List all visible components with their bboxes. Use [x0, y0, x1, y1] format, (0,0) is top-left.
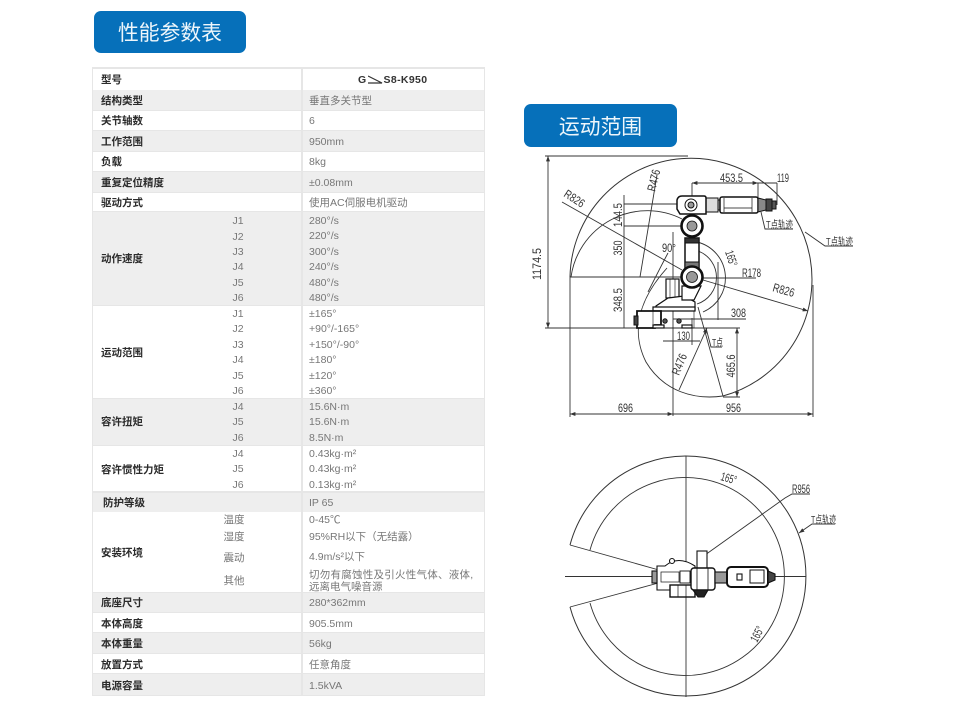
row group: motion range: J1: [232, 308, 244, 320]
row group: allowable inertia: [93, 446, 484, 491]
row group: allowable inertia: 0.43kg·m²: [309, 463, 356, 475]
row group: allowable torque: J6: [232, 432, 244, 444]
row: payload: 负载: [101, 156, 122, 168]
row group: allowable inertia: J5: [232, 463, 244, 475]
row group: motion range: J6: [232, 385, 244, 397]
side view labels: R826: [561, 187, 588, 211]
row: payload: 8kg: [309, 156, 326, 168]
radial limit lines: [570, 545, 666, 572]
row group: allowable torque: 8.5N·m: [309, 432, 343, 444]
row: working range: [101, 136, 344, 148]
side view labels: 465.6: [724, 354, 738, 378]
row group: installation environment: [93, 512, 484, 593]
row: drive method: 驱动方式: [101, 197, 143, 209]
row group: allowable torque: 15.6N·m: [309, 401, 349, 413]
row: protection class: [103, 497, 333, 509]
J2 range arcs: [697, 242, 725, 312]
heading: motion range: [524, 104, 677, 147]
top view labels: [719, 469, 836, 644]
row: joint axes: 关节轴数: [101, 115, 143, 127]
row: base size: 底座尺寸: [101, 597, 143, 609]
row group: motion range: 运动范围: [101, 347, 143, 359]
row group: allowable torque: 容许扭矩: [101, 416, 143, 428]
row group: installation environment: 温度: [224, 514, 244, 526]
row: power capacity: 电源容量: [101, 680, 143, 692]
row: repeatability: [101, 177, 353, 189]
row group: motion speed: 动作速度: [101, 253, 143, 265]
table background: [92, 67, 485, 696]
row: body height: [93, 613, 484, 632]
row: joint axes: [93, 111, 484, 130]
side view labels: 348.5: [611, 288, 625, 312]
row group: installation environment: 其他: [224, 575, 244, 587]
row group: motion speed: 480°/s: [309, 277, 339, 289]
row: structure type: 垂直多关节型: [309, 95, 372, 107]
row group: motion range: ±180°: [309, 354, 336, 366]
row group: installation environment: 0-45℃: [309, 514, 341, 526]
chart: top view working envelope: [565, 456, 835, 697]
row group: motion range: J3: [232, 339, 244, 351]
row group: motion range: +150°/-90°: [309, 339, 359, 351]
base turret: [666, 279, 679, 298]
row group: motion range: J4: [232, 354, 244, 366]
row: structure type: [101, 95, 372, 107]
side view labels: R476: [644, 168, 663, 193]
row group: allowable inertia: 容许惯性力矩: [101, 464, 164, 476]
side view labels: T点轨迹: [826, 235, 853, 248]
T point leader: [799, 524, 835, 533]
row: protection class: IP 65: [309, 497, 333, 509]
row: protection class: 防护等级: [103, 497, 145, 509]
side view labels: T点轨迹: [766, 218, 793, 231]
row: body weight: 本体重量: [101, 638, 143, 650]
outer arc R826: [570, 158, 812, 396]
row group: allowable torque: [101, 401, 349, 444]
row group: allowable torque: J5: [232, 416, 244, 428]
lower inner arc R476: [638, 268, 723, 397]
row: drive method: [93, 193, 484, 211]
side view labels: 1174.5: [530, 248, 544, 280]
side view labels: T点: [712, 337, 723, 349]
row group: motion speed: J2: [232, 231, 244, 243]
row group: motion speed: 240°/s: [309, 261, 339, 273]
side view labels: R826: [771, 280, 796, 300]
row: body height: 本体高度: [101, 618, 143, 630]
row group: motion speed: 480°/s: [309, 292, 339, 304]
row: payload: [93, 152, 484, 171]
row: mounting: 任意角度: [309, 659, 351, 671]
row group: motion speed: J6: [232, 292, 244, 304]
row group: motion range: ±165°: [309, 308, 336, 320]
side view labels: 165°: [722, 249, 740, 268]
side view labels: 119: [777, 171, 789, 185]
side view labels: R476: [669, 351, 690, 377]
row: model: [93, 69, 484, 90]
side view labels: 308: [731, 306, 746, 320]
top view labels: T点轨迹: [811, 513, 836, 526]
shoulder joint: [682, 286, 701, 300]
side view labels: 453.5: [720, 171, 743, 185]
row group: motion range: ±120°: [309, 370, 336, 382]
row: model: G S8-K950: [358, 74, 427, 86]
row group: motion speed: [101, 215, 339, 304]
side view labels: 130: [677, 329, 690, 343]
heading: performance parameters: [94, 11, 246, 53]
side view labels: 144.5: [611, 203, 625, 227]
side view labels: 350: [611, 240, 625, 256]
row: body weight: 56kg: [309, 638, 332, 650]
row group: motion speed: 220°/s: [309, 230, 339, 242]
row: base size: [101, 597, 366, 609]
row: working range: 工作范围: [101, 136, 143, 148]
row group: motion speed: 300°/s: [309, 246, 339, 258]
row: joint axes: 6: [309, 115, 315, 127]
row: model: 型号: [101, 74, 122, 86]
icon: robot side view: [634, 196, 776, 328]
axis lines: [685, 456, 687, 697]
row group: installation environment: 远离电气噪音源: [309, 581, 382, 593]
row group: installation environment: 切勿有腐蚀性及引火性气体、液体,: [309, 569, 473, 581]
heading: performance parameters: 性能参数表: [118, 22, 222, 45]
chart: side view working envelope: [545, 156, 853, 417]
row group: motion speed: J3: [232, 246, 244, 258]
row: repeatability: 重复定位精度: [101, 177, 164, 189]
head: [677, 196, 706, 214]
row: working range: 950mm: [309, 136, 344, 148]
inner J2 range arc: [697, 251, 716, 304]
row: power capacity: 1.5kVA: [309, 680, 342, 692]
icon: robot top view: [652, 551, 775, 597]
heading: motion range: 运动范围: [559, 116, 642, 139]
inner arc: [590, 478, 784, 676]
row group: allowable torque: 15.6N·m: [309, 416, 349, 428]
row group: motion range: J5: [232, 370, 244, 382]
row group: installation environment: 安装环境: [101, 547, 143, 559]
top view labels: R956: [792, 482, 810, 496]
row group: motion speed: J4: [232, 261, 244, 273]
row: body weight: [101, 638, 332, 650]
row group: motion speed: J5: [232, 277, 244, 289]
top view labels: 165°: [719, 469, 739, 487]
forearm: [705, 198, 718, 212]
row group: allowable torque: J4: [232, 401, 244, 413]
row: structure type: 结构类型: [101, 95, 143, 107]
side view labels: 90°: [662, 241, 676, 255]
row: power capacity: [101, 680, 342, 692]
row group: installation environment: 95%RH以下（无结露）: [309, 531, 419, 543]
row: base size: 280*362mm: [309, 597, 366, 609]
row group: allowable inertia: J6: [232, 479, 244, 491]
row group: allowable inertia: J4: [232, 448, 244, 460]
row group: allowable inertia: 0.43kg·m²: [309, 448, 356, 460]
side view labels: 696: [618, 401, 633, 415]
row group: motion range: ±360°: [309, 385, 336, 397]
row group: installation environment: 4.9m/s²以下: [309, 551, 365, 563]
side view labels: R178: [742, 266, 761, 280]
row group: installation environment: 震动: [224, 552, 244, 564]
radius leader lines: [562, 175, 853, 396]
R956 leader: [698, 494, 810, 560]
dimension lines: [545, 156, 813, 417]
outer arc: [570, 456, 806, 696]
row group: motion speed: 280°/s: [309, 215, 339, 227]
row: mounting: [93, 654, 484, 673]
row group: motion range: +90°/-165°: [309, 323, 359, 335]
upper inner arc R476: [571, 211, 682, 277]
side view labels: 956: [726, 401, 741, 415]
row group: motion range: [93, 306, 484, 398]
row: repeatability: ±0.08mm: [309, 177, 353, 189]
row group: allowable inertia: 0.13kg·m²: [309, 479, 356, 491]
row: drive method: 使用AC伺服电机驱动: [309, 197, 408, 209]
upper arm: [685, 238, 699, 270]
elbow joint: [682, 216, 702, 236]
top view labels: 165°: [747, 624, 767, 644]
row group: motion range: J2: [232, 323, 244, 335]
row group: motion speed: J1: [232, 215, 244, 227]
side view labels: [530, 168, 853, 415]
row: body height: 905.5mm: [309, 618, 353, 630]
row group: installation environment: 湿度: [224, 531, 244, 543]
base block: [637, 311, 661, 328]
row: mounting: 放置方式: [101, 659, 143, 671]
